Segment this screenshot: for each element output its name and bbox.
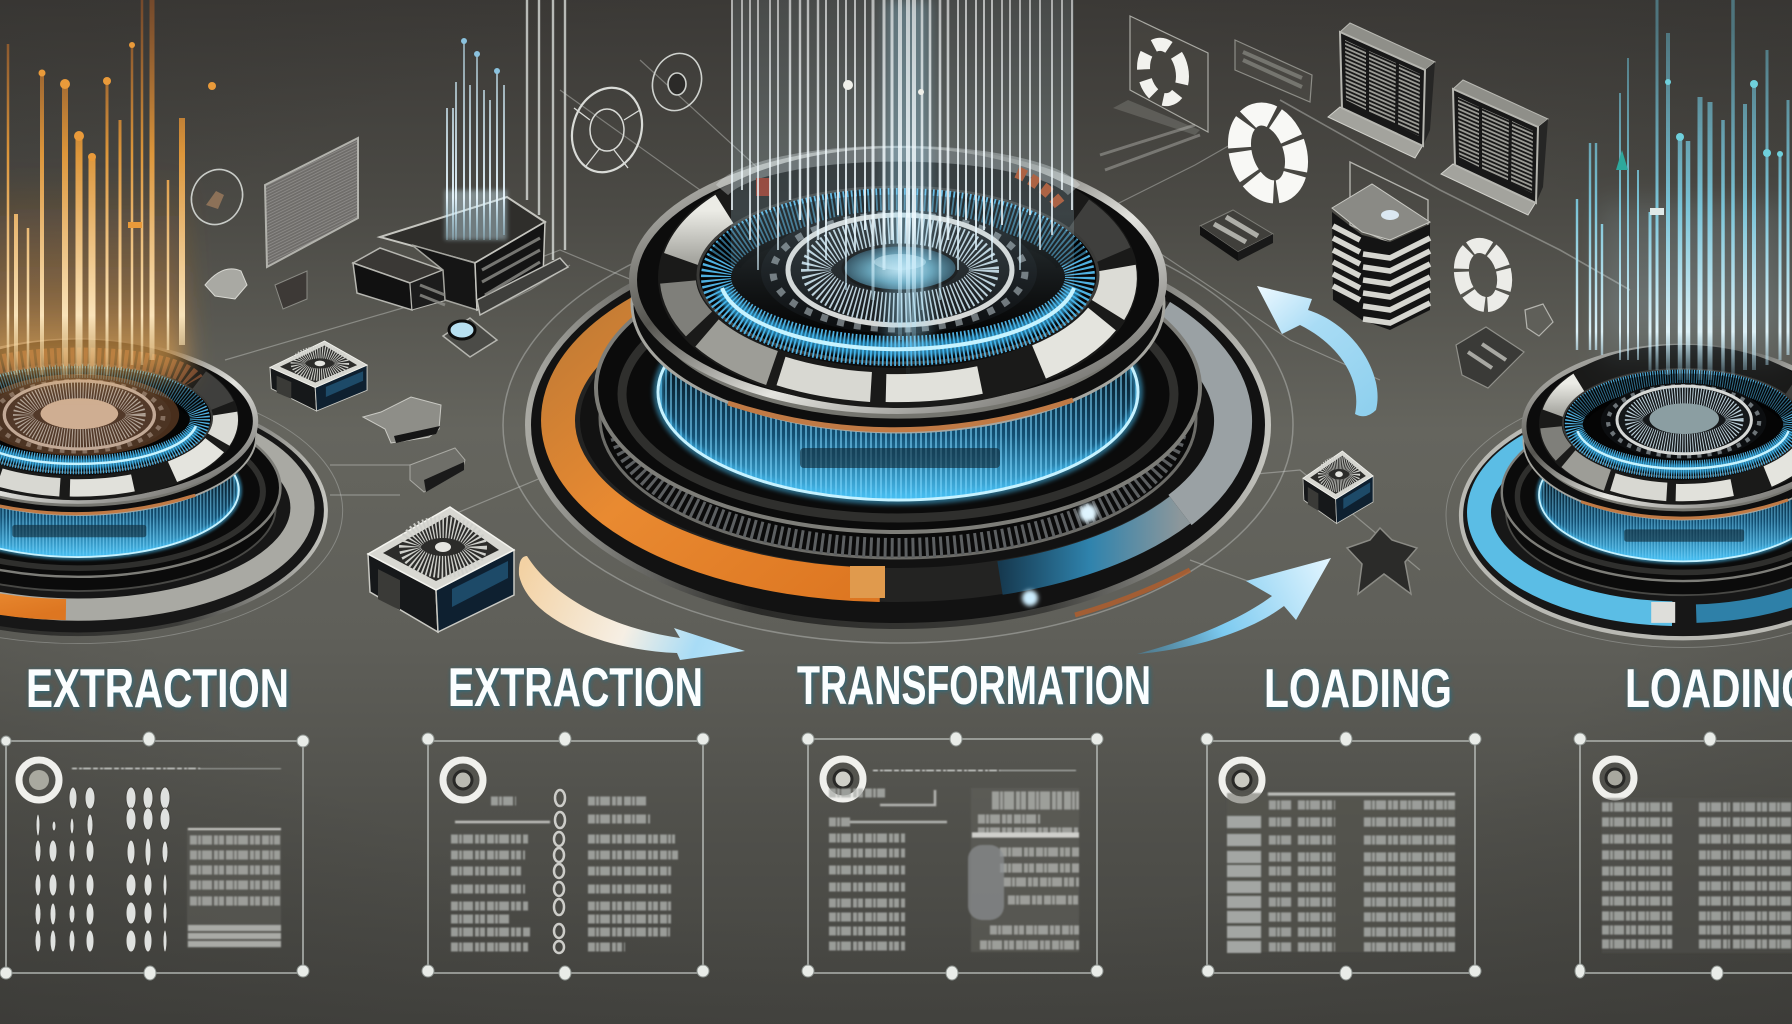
arrow: extraction to transformation (519, 556, 745, 660)
network lines connecting components (225, 60, 1630, 600)
orange band end tab (850, 566, 885, 598)
base band track (563, 255, 1233, 585)
left list (829, 790, 947, 946)
panel: extraction 2 (422, 732, 709, 980)
blue band (1000, 510, 1180, 578)
icon: wire gauge (561, 79, 653, 181)
icon: small cube (270, 341, 367, 411)
icon: tilted panel (1235, 40, 1312, 102)
orange data beams: left (0, 0, 216, 375)
right platform: loading (1446, 346, 1792, 647)
title streak (72, 768, 281, 769)
title bar (1648, 764, 1792, 776)
panel: loading 2 (1574, 732, 1792, 980)
arrow: upward return (1257, 286, 1378, 416)
icon: server block with beam (353, 38, 568, 315)
icon: small white ring (1455, 241, 1511, 309)
label: transformation: TRANSFORMATION (797, 654, 1151, 716)
icon: server stack (1332, 162, 1430, 330)
label: extraction 2: EXTRACTION (448, 656, 703, 718)
grey band (1160, 318, 1233, 510)
outer glass halo (503, 207, 1293, 643)
data table (1227, 793, 1455, 952)
data rows (1602, 798, 1792, 953)
rows (451, 801, 678, 947)
badge (1596, 759, 1634, 797)
icon: small bracket (1525, 304, 1553, 336)
icon: monitor two (1441, 80, 1548, 215)
icon: wire dial (645, 47, 709, 117)
vertical light bars (527, 0, 565, 260)
title streak (873, 770, 1076, 771)
icon: lens chip (443, 318, 497, 357)
icon: gauge left (183, 161, 251, 233)
panel: transformation (802, 732, 1103, 980)
lower highlight flare (1079, 504, 1097, 522)
beam above block (445, 190, 507, 240)
icon: metal fragment (363, 397, 441, 443)
orange band (558, 312, 880, 585)
panel: extraction 1 (0, 732, 309, 980)
icon: star gear (1347, 528, 1417, 594)
badge (823, 759, 863, 799)
right block (968, 788, 1079, 952)
icon: metal fragment (410, 448, 465, 492)
icon: monitor one (1328, 23, 1435, 158)
left platform: extraction (0, 341, 343, 644)
label: loading 1: LOADING (1264, 657, 1452, 719)
teal data beams: right (1577, 0, 1788, 380)
icon: chip (1200, 210, 1273, 261)
icon: big chip (368, 507, 514, 632)
panel: loading 1 (1201, 732, 1481, 980)
base disc (528, 224, 1268, 626)
icon: hatched screen (265, 138, 358, 267)
inner machinery ring (600, 278, 1196, 558)
light beams: main (731, 0, 1074, 380)
badge (1222, 760, 1262, 800)
main platform: transformation (503, 150, 1293, 643)
icon: mechanical part (1456, 327, 1524, 388)
title bar (1276, 766, 1455, 778)
icon: small silver parts (205, 269, 307, 309)
arrow: transformation to loading (1137, 558, 1331, 654)
glyph columns (35, 787, 170, 952)
badge (19, 760, 59, 800)
icon: dark cube (1303, 451, 1373, 524)
mini table (187, 828, 281, 948)
stacked discs (596, 150, 1200, 532)
title streak (497, 765, 675, 773)
label: extraction 1: EXTRACTION (26, 657, 289, 719)
status badges (554, 790, 565, 953)
rear glow band and rust details (722, 154, 1074, 190)
rust edge (1075, 570, 1190, 615)
badge (443, 760, 483, 800)
icon: large white ring (1230, 107, 1306, 199)
icon: tilted dashboard with ring (1100, 16, 1208, 170)
